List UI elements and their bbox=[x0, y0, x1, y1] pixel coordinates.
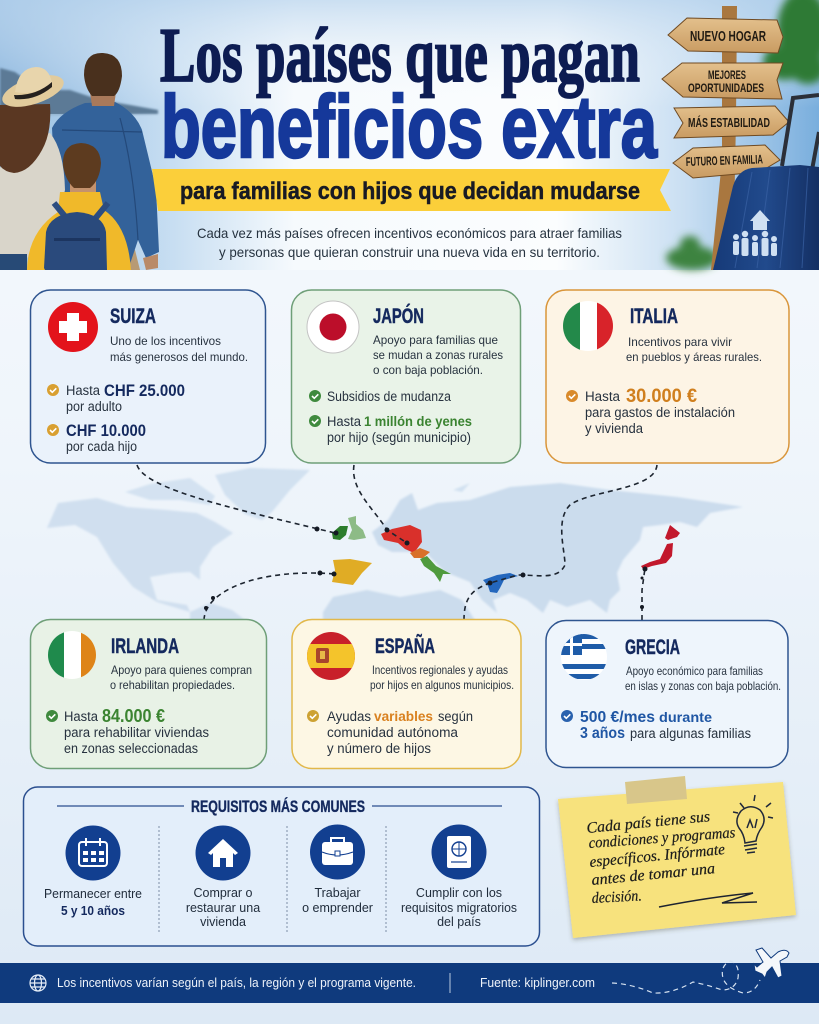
highlighted country: Ireland bbox=[332, 526, 348, 540]
intro text: Cada vez más países ofrecen incentivos económicos para atraer familias bbox=[197, 225, 622, 241]
heading: Italia: ITALIA bbox=[630, 305, 678, 328]
benefit: one million yen: por hijo (según municipio) bbox=[327, 430, 471, 445]
boy bbox=[27, 143, 131, 270]
icon: globe bbox=[30, 975, 46, 991]
benefit: one million yen: 1 millón de yenes bbox=[364, 413, 472, 429]
description: Suiza: Uno de los incentivos bbox=[110, 334, 221, 348]
description: Japón: Apoyo para familias que bbox=[373, 333, 498, 347]
benefit: 30.000 euros bbox=[566, 386, 735, 436]
benefit: adult: CHF 25.000 bbox=[104, 381, 185, 400]
highlighted country: Greece bbox=[483, 573, 518, 593]
icon: light bulb bbox=[733, 795, 773, 853]
sticky note bbox=[558, 776, 796, 938]
note text: decisión. bbox=[591, 887, 642, 907]
panel: Japón bbox=[292, 290, 520, 463]
benefit: 84.000 euros: Hasta bbox=[64, 709, 98, 724]
panel: Grecia bbox=[546, 620, 788, 768]
description: Japón bbox=[373, 333, 503, 377]
benefit: 500 euros per month: para algunas familias bbox=[630, 726, 751, 741]
benefit: 84.000 euros: para rehabilitar viviendas bbox=[64, 725, 209, 740]
benefit: variable aid: Ayudas bbox=[327, 709, 371, 724]
description: España bbox=[370, 663, 514, 692]
icon: Italian flag bbox=[563, 301, 614, 351]
sign: mejores oportunidades: MEJORES bbox=[708, 70, 746, 82]
benefit: 30.000 euros: para gastos de instalación bbox=[585, 405, 735, 420]
flight path bbox=[612, 961, 760, 993]
benefit: adult: Hasta bbox=[66, 383, 100, 398]
requirement: stay: 5 y 10 años bbox=[61, 904, 125, 918]
description: Japón: se mudan a zonas rurales bbox=[373, 348, 503, 362]
icon: Japanese flag bbox=[307, 301, 359, 353]
benefit: 84.000 euros bbox=[46, 706, 209, 756]
icon: Spanish flag bbox=[307, 632, 355, 680]
benefit: adult bbox=[47, 381, 185, 414]
benefit: 500 euros per month: 500 €/mes bbox=[580, 709, 655, 726]
sign: más estabilidad bbox=[674, 106, 789, 138]
requirement: migration: del país bbox=[437, 915, 481, 929]
requirement: buy or restore: Comprar o bbox=[193, 886, 253, 900]
panel: Suiza bbox=[30, 290, 266, 463]
title line 2: beneficios extra bbox=[161, 77, 658, 176]
benefit: child bbox=[47, 421, 146, 454]
benefit: variable aid: y número de hijos bbox=[327, 741, 431, 756]
sign: mejores oportunidades: OPORTUNIDADES bbox=[688, 83, 764, 95]
illustration: wooden signpost bbox=[662, 6, 789, 270]
requirement: migration: Cumplir con los bbox=[416, 886, 502, 900]
icon: passport bbox=[447, 836, 471, 868]
tape bbox=[625, 776, 687, 804]
requirement: migration: requisitos migratorios bbox=[401, 901, 517, 915]
benefit: one million yen: Hasta bbox=[327, 414, 361, 429]
requirement: buy or restore bbox=[186, 826, 260, 929]
requirement: stay: Permanecer entre bbox=[44, 887, 142, 901]
description: Italia: Incentivos para vivir bbox=[628, 335, 732, 349]
heading: España: ESPAÑA bbox=[375, 635, 435, 658]
benefit: 500 euros per month bbox=[561, 709, 751, 742]
highlighted country: Italy bbox=[410, 548, 451, 582]
highlighted country: Spain bbox=[332, 559, 372, 585]
requirement: buy or restore: vivienda bbox=[200, 915, 246, 929]
yellow ribbon subtitle: para familias con hijos que decidan mudarse bbox=[180, 178, 640, 205]
dashed connector lines bbox=[137, 465, 657, 620]
description: Grecia bbox=[625, 664, 781, 693]
description: España: Incentivos regionales y ayudas bbox=[372, 663, 508, 677]
highlighted country: United Kingdom bbox=[348, 516, 366, 540]
icon: Swiss flag bbox=[48, 302, 98, 352]
benefit: 30.000 euros: Hasta bbox=[585, 389, 620, 404]
sign: más estabilidad: MÁS ESTABILIDAD bbox=[688, 115, 770, 130]
heading: requisitos: REQUISITOS MÁS COMUNES bbox=[191, 797, 365, 816]
description: Italia: en pueblos y áreas rurales. bbox=[626, 350, 762, 364]
description: Irlanda: o rehabilitan propiedades. bbox=[110, 678, 235, 692]
panel: España bbox=[292, 620, 521, 768]
benefit: 84.000 euros: en zonas seleccionadas bbox=[64, 741, 198, 756]
heading: Suiza: SUIZA bbox=[110, 305, 156, 328]
requirement: work bbox=[302, 824, 373, 915]
requirement: migration bbox=[401, 824, 517, 929]
icon: airplane bbox=[754, 948, 789, 978]
scribble underline bbox=[659, 893, 757, 907]
requirement: buy or restore: restaurar una bbox=[186, 901, 260, 915]
requirement: work: o emprender bbox=[302, 901, 373, 915]
note text: Cada país tiene sus bbox=[586, 808, 711, 837]
icon: Irish flag bbox=[48, 631, 97, 679]
description: Grecia: en islas y zonas con baja población. bbox=[625, 679, 781, 693]
description: Suiza bbox=[110, 334, 248, 364]
benefit: 500 euros per month: 3 años bbox=[580, 725, 625, 742]
heading: Irlanda: IRLANDA bbox=[111, 635, 179, 658]
sign: futuro en familia: FUTURO EN FAMILIA bbox=[686, 152, 763, 169]
panel: requisitos más comunes bbox=[24, 787, 540, 946]
icon: calendar bbox=[79, 838, 107, 866]
illustration: blue suitcase bbox=[713, 95, 819, 270]
sign: mejores oportunidades bbox=[662, 63, 783, 99]
benefit: variable aid: variables bbox=[374, 708, 433, 724]
benefit: one million yen bbox=[309, 413, 472, 445]
footer source: Fuente: kiplinger.com bbox=[480, 976, 595, 990]
benefit: 30.000 euros: y vivienda bbox=[585, 421, 643, 436]
benefit: 84.000 euros: 84.000 € bbox=[102, 706, 165, 726]
man bbox=[52, 53, 159, 270]
intro text bbox=[197, 225, 622, 260]
description: España: por hijos en algunos municipios. bbox=[370, 678, 514, 692]
footer bar bbox=[0, 948, 819, 1003]
benefit: 30.000 euros: 30.000 € bbox=[626, 386, 697, 407]
description: Japón: o con baja población. bbox=[373, 363, 483, 377]
icon: house bbox=[208, 839, 238, 867]
panel: Irlanda bbox=[30, 620, 266, 768]
highlighted country: central Europe bbox=[381, 525, 422, 553]
heading: Japón: JAPÓN bbox=[373, 304, 424, 328]
icon: briefcase bbox=[322, 838, 353, 865]
world map bbox=[47, 468, 743, 640]
heading: Grecia: GRECIA bbox=[625, 636, 680, 659]
description: Irlanda: Apoyo para quienes compran bbox=[111, 663, 252, 677]
benefit: 500 euros per month: durante bbox=[659, 709, 712, 725]
illustration: family seen from behind bbox=[0, 53, 159, 270]
sign: futuro en familia bbox=[673, 145, 780, 178]
note text: específicos. Infórmate bbox=[589, 841, 726, 871]
sign: nuevo hogar: NUEVO HOGAR bbox=[690, 29, 766, 45]
note text: condiciones y programas bbox=[588, 824, 736, 852]
footer note: Los incentivos varían según el país, la región y el programa vigente. bbox=[57, 976, 416, 990]
description: Irlanda bbox=[110, 663, 252, 692]
benefit: variable aid bbox=[307, 708, 473, 756]
description: Grecia: Apoyo económico para familias bbox=[626, 664, 763, 678]
sign: nuevo hogar bbox=[668, 18, 783, 53]
benefit: moving subsidies: Subsidios de mudanza bbox=[327, 389, 451, 404]
icon: house and family bbox=[733, 210, 777, 256]
requirement: stay bbox=[44, 826, 142, 918]
icon: Greek flag bbox=[561, 634, 607, 680]
note text bbox=[586, 808, 736, 907]
highlighted country: Japan bbox=[641, 525, 680, 569]
woman bbox=[0, 67, 67, 270]
note text: antes de tomar una bbox=[591, 860, 716, 889]
description: Suiza: más generosos del mundo. bbox=[110, 350, 248, 364]
header illustration background bbox=[0, 0, 819, 270]
benefit: child: por cada hijo bbox=[66, 439, 137, 454]
benefit: variable aid: según bbox=[438, 709, 473, 724]
requirement: work: Trabajar bbox=[314, 886, 361, 900]
description: Italia bbox=[626, 335, 762, 364]
benefit: adult: por adulto bbox=[66, 399, 122, 414]
benefit: variable aid: comunidad autónoma bbox=[327, 725, 458, 740]
intro text: y personas que quieran construir una nueva vida en su territorio. bbox=[219, 244, 600, 260]
yellow ribbon subtitle bbox=[152, 169, 671, 211]
benefit: child: CHF 10.000 bbox=[66, 421, 146, 440]
panel: Italia bbox=[546, 290, 789, 463]
